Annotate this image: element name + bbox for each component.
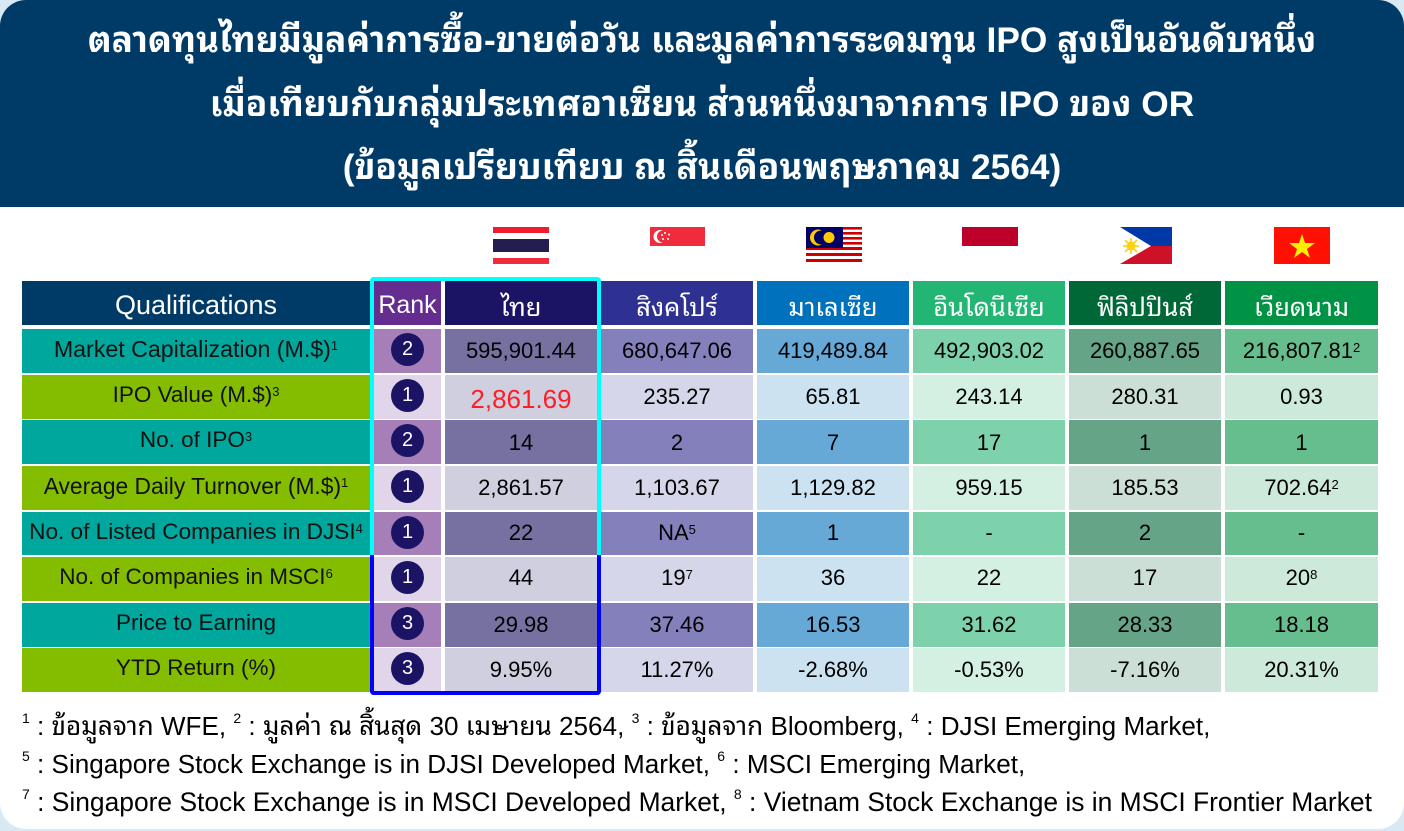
icon: Thailand flag (493, 227, 549, 264)
row: No. of Listed Companies in DJSI: 2 (1139, 520, 1151, 544)
row: Average Daily Turnover: Average Daily Turnover (M.$) (44, 472, 341, 498)
row: No. of Listed Companies in DJSI: NA (658, 520, 689, 544)
row: No. of Listed Companies in DJSI (22, 512, 1378, 555)
header row: เวียดนาม (1254, 294, 1349, 322)
row: No. of Companies in MSCI: 44 (509, 565, 533, 590)
row: IPO Value (22, 375, 1378, 419)
row: No. of Listed Companies in DJSI: 1 (827, 520, 839, 544)
row: No. of Companies in MSCI: 22 (977, 565, 1001, 590)
row: No. of Companies in MSCI: 36 (821, 565, 845, 590)
row: No. of IPO: 2 (402, 429, 413, 451)
row: No. of IPO: 14 (509, 430, 533, 455)
row: No. of IPO: 2 (671, 430, 683, 455)
highlight frame: Thailand column, cyan upper part (370, 277, 601, 555)
row: Market Capitalization: 260,887.65 (1090, 338, 1200, 363)
row: IPO Value: 243.14 (955, 384, 1023, 409)
header row: สิงคโปร์ (636, 294, 718, 322)
title banner (0, 0, 1404, 207)
row: No. of Companies in MSCI: 7 (686, 567, 693, 582)
row: No. of IPO: 7 (827, 430, 839, 455)
row: No. of IPO: No. of IPO (140, 427, 245, 452)
title banner: ตลาดทุนไทยมีมูลค่าการซื้อ-ขายต่อวัน และมูลค่าการระดมทุน IPO สูงเป็นอันดับหนึ่ง (88, 21, 1316, 60)
row: Market Capitalization: Market Capitalization (M.$) (54, 336, 331, 362)
row: Average Daily Turnover: 959.15 (955, 475, 1023, 500)
row: No. of Listed Companies in DJSI: 4 (356, 520, 363, 536)
row: No. of Listed Companies in DJSI: 5 (689, 522, 696, 536)
row: No. of IPO: 1 (1295, 430, 1308, 455)
row: Average Daily Turnover: 1,103.67 (634, 475, 720, 500)
row: Average Daily Turnover: 1 (341, 475, 348, 490)
row: YTD Return: -7.16% (1110, 657, 1180, 682)
row: No. of Listed Companies in DJSI: No. of Listed Companies in DJSI (29, 518, 356, 544)
row: No. of Companies in MSCI: 20 (1286, 565, 1310, 590)
row: Price to Earning: 3 (402, 612, 413, 634)
header row (22, 281, 1378, 325)
header row: ไทย (501, 294, 541, 322)
row: Market Capitalization: 1 (331, 338, 338, 353)
footnotes: 1 : ข้อมูลจาก WFE, 2 : มูลค่า ณ สิ้นสุด 30 เมษายน 2564, 3 : ข้อมูลจาก Bloomberg, 4 : DJSI Emerging Market, (22, 710, 1210, 741)
footnotes: 7 : Singapore Stock Exchange is in MSCI Developed Market, 8 : Vietnam Stock Exchange is in MSCI Frontier Market (22, 786, 1372, 817)
row: IPO Value: 1 (402, 384, 413, 406)
row: YTD Return: 3 (402, 657, 413, 679)
icon: Philippines flag (1120, 227, 1172, 264)
header row: อินโดนีเซีย (933, 294, 1045, 322)
header row: Qualifications (115, 290, 277, 320)
row: No. of Listed Companies in DJSI: 1 (402, 521, 413, 543)
row: YTD Return: YTD Return (%) (116, 655, 276, 680)
row: Market Capitalization: 419,489.84 (778, 338, 888, 363)
row: No. of Listed Companies in DJSI: 22 (509, 520, 533, 544)
row: No. of Listed Companies in DJSI: - (1298, 520, 1305, 544)
row: Price to Earning (22, 603, 1378, 647)
row: IPO Value: IPO Value (M.$) (113, 382, 272, 407)
row: YTD Return: 20.31% (1264, 657, 1339, 682)
row: Market Capitalization: 492,903.02 (934, 338, 1044, 363)
row: Average Daily Turnover (22, 466, 1378, 510)
highlight frame: Thailand column, blue lower part (370, 555, 601, 695)
row: No. of Listed Companies in DJSI: - (985, 520, 993, 544)
row: IPO Value: 235.27 (643, 384, 711, 409)
row: Average Daily Turnover: 2,861.57 (478, 475, 564, 500)
icon: Malaysia flag (806, 227, 862, 262)
footnotes (22, 706, 1372, 817)
row: Market Capitalization: 680,647.06 (622, 338, 732, 363)
row: IPO Value: 0.93 (1280, 384, 1323, 409)
row: Average Daily Turnover: 1 (402, 475, 413, 497)
row: No. of Companies in MSCI: 1 (402, 566, 413, 588)
row: Price to Earning: 28.33 (1117, 612, 1173, 637)
row: IPO Value: 3 (272, 384, 279, 399)
row: Average Daily Turnover: 185.53 (1111, 475, 1179, 500)
row: No. of IPO: 17 (977, 430, 1001, 455)
row: Market Capitalization: 2 (1353, 340, 1360, 355)
row: Price to Earning: 16.53 (805, 612, 861, 637)
row: IPO Value: 2,861.69 (470, 384, 572, 414)
title banner: เมื่อเทียบกับกลุ่มประเทศอาเซียน ส่วนหนึ่งมาจากการ IPO ของ OR (210, 85, 1194, 124)
icon: Vietnam flag (1274, 227, 1330, 264)
header row: Rank (378, 291, 437, 319)
row: Average Daily Turnover: 1,129.82 (790, 475, 876, 500)
row: Price to Earning: Price to Earning (116, 610, 276, 635)
row: Market Capitalization (22, 329, 1378, 373)
footnotes: 5 : Singapore Stock Exchange is in DJSI Developed Market, 6 : MSCI Emerging Market, (22, 748, 1025, 779)
row: YTD Return (22, 648, 1378, 692)
row: YTD Return: -2.68% (798, 657, 868, 682)
row: No. of IPO (22, 420, 1378, 464)
row: Price to Earning: 31.62 (961, 612, 1017, 637)
row: Price to Earning: 37.46 (649, 612, 705, 637)
row: Market Capitalization: 595,901.44 (466, 338, 576, 363)
row: No. of Companies in MSCI: No. of Companies in MSCI (59, 564, 326, 589)
row: YTD Return: 11.27% (640, 657, 713, 682)
row: No. of Companies in MSCI: 17 (1133, 565, 1157, 590)
header row: มาเลเซีย (788, 294, 878, 322)
header row: ฟิลิปปินส์ (1097, 294, 1193, 322)
icon: Indonesia flag (962, 227, 1018, 246)
country flags (493, 227, 1330, 264)
row: YTD Return: -0.53% (954, 657, 1024, 682)
row: Average Daily Turnover: 2 (1332, 477, 1339, 492)
row: Market Capitalization: 2 (402, 338, 413, 360)
row: No. of Companies in MSCI: 8 (1310, 567, 1317, 582)
row: Average Daily Turnover: 702.64 (1264, 475, 1332, 500)
title banner: (ข้อมูลเปรียบเทียบ ณ สิ้นเดือนพฤษภาคม 2564) (343, 148, 1061, 187)
row: Price to Earning: 29.98 (493, 612, 549, 637)
row: No. of IPO: 3 (245, 429, 252, 444)
row: Market Capitalization: 216,807.81 (1243, 338, 1353, 363)
row: YTD Return: 9.95% (490, 657, 552, 682)
row: Price to Earning: 18.18 (1274, 612, 1329, 637)
row: IPO Value: 280.31 (1111, 384, 1179, 409)
row: No. of Companies in MSCI (22, 557, 1378, 601)
row: IPO Value: 65.81 (805, 384, 861, 409)
row: No. of Companies in MSCI: 19 (661, 565, 686, 590)
row: No. of Companies in MSCI: 6 (326, 566, 333, 581)
icon: Singapore flag (650, 227, 705, 246)
row: No. of IPO: 1 (1139, 430, 1151, 455)
